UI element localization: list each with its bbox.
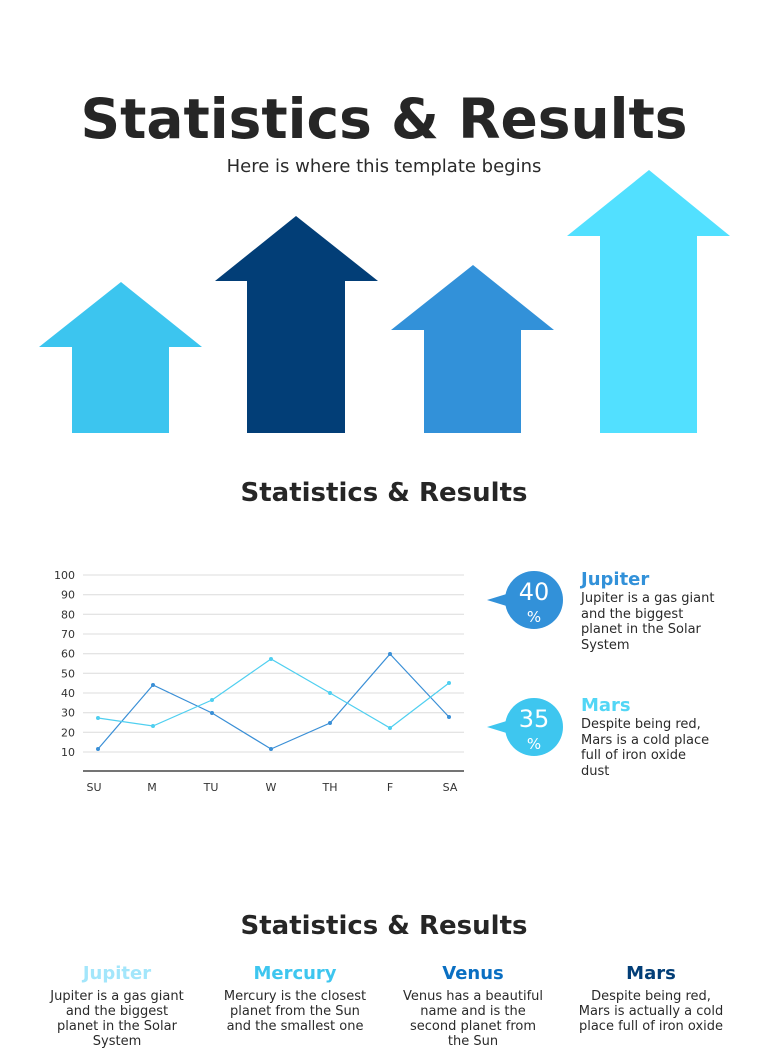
column: Jupiter [50,963,184,1049]
arrow 2 [215,216,378,433]
line chart: M [147,781,157,794]
line chart: TU [203,781,218,794]
column: Mars: Mars is actually a cold [579,1004,723,1019]
badge: 40%: % [527,608,541,626]
column: Mercury [224,963,366,1034]
line chart: F [387,781,393,794]
column: Jupiter: System [93,1034,141,1049]
line chart: 10 [61,746,75,759]
line chart: 50 [61,667,75,680]
line chart: 40 [61,687,75,700]
badge: 35%: % [527,735,541,753]
line chart: W [266,781,277,794]
column: Mars: place full of iron oxide [579,1019,723,1034]
column: Jupiter: Jupiter is a gas giant [50,989,184,1004]
line chart: 70 [61,628,75,641]
column: Mars [579,963,723,1034]
column: Venus: Venus has a beautiful [403,989,543,1004]
arrow 4 [567,170,730,433]
column: Jupiter: planet in the Solar [57,1019,177,1034]
badge: 35% [487,698,563,756]
line chart: SU [86,781,102,794]
line chart: SA [443,781,458,794]
column: Jupiter: and the biggest [66,1004,168,1019]
column: Venus: name and is the [420,1004,526,1019]
column: Venus [403,963,543,1049]
line chart: 80 [61,608,75,621]
line chart: 60 [61,648,75,661]
series light [98,659,449,728]
line chart: 20 [61,726,75,739]
line chart: 100 [54,569,75,582]
section heading 3: Statistics & Results [240,911,527,941]
badge: 35%: 35 [519,705,549,733]
column: Mercury: Mercury [253,963,337,984]
column: Venus: Venus [442,963,504,984]
badge: 40%: 40 [519,578,549,606]
column: Mercury: Mercury is the closest [224,989,366,1004]
column: Venus: the Sun [448,1034,498,1049]
callout: Mars: Despite being red, Mars is a cold place full of iron oxide dust [581,717,709,778]
line chart [54,569,464,794]
callout: Jupiter: Jupiter [581,569,649,590]
column: Mars: Despite being red, [591,989,711,1004]
line chart: 90 [61,589,75,602]
callout: Jupiter: Jupiter is a gas giant and the biggest planet in the Solar System [581,591,714,652]
column: Mercury: and the smallest one [227,1019,363,1034]
arrow 3 [391,265,554,433]
subtitle: Here is where this template begins [227,156,541,177]
arrow 1 [39,282,202,433]
title: Statistics & Results [80,87,688,151]
callout: Mars: Mars [581,695,631,716]
section heading 2: Statistics & Results [240,478,527,508]
line chart: 30 [61,707,75,720]
badge: 40% [487,571,563,629]
column: Mars: Mars [626,963,676,984]
column: Jupiter: Jupiter [83,963,151,984]
series dark [98,654,449,749]
column: Mercury: planet from the Sun [230,1004,360,1019]
line chart: TH [322,781,338,794]
arrows [39,170,730,433]
column: Venus: second planet from [410,1019,536,1034]
